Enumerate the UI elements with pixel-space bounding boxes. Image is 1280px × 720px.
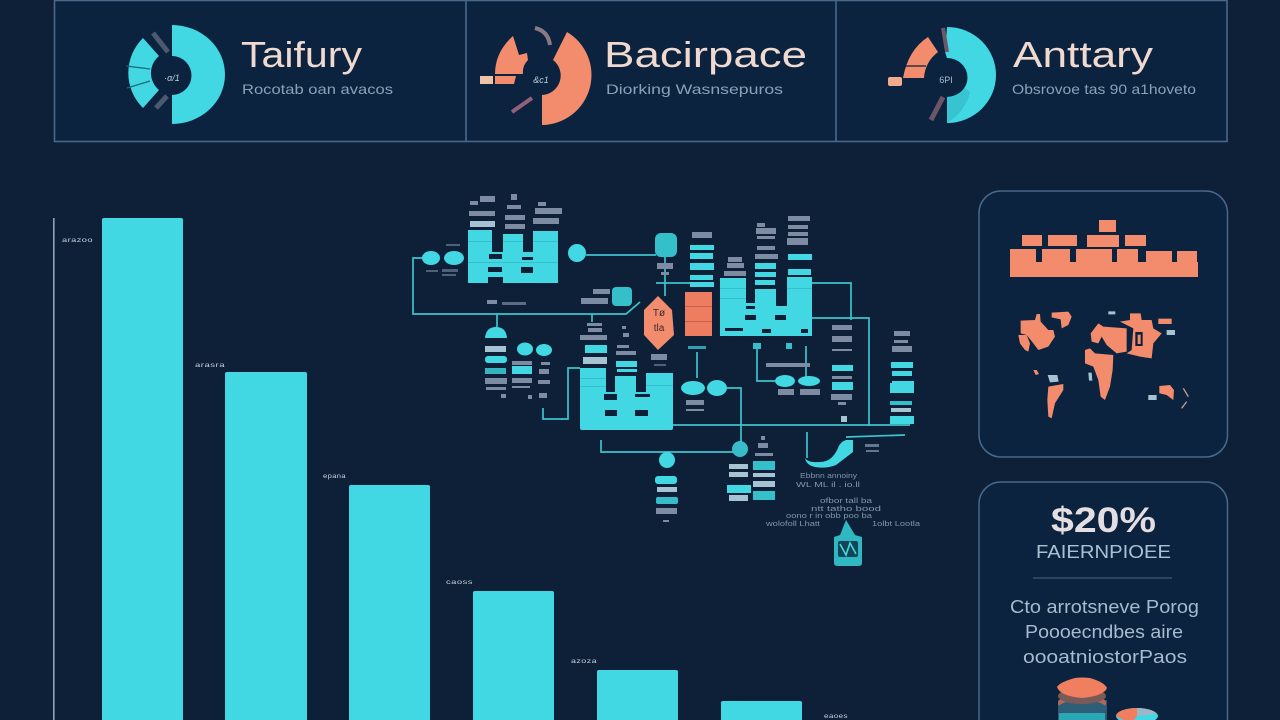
panel: brick chart and world map (979, 191, 1228, 457)
flow diagram (413, 194, 920, 566)
panel: statistic card (979, 482, 1228, 720)
column: dome stack (485, 327, 507, 398)
icon: cyan donut chart: ·α/1 (164, 73, 180, 83)
text: diagram small captions: ofbor tall ba (820, 498, 872, 505)
column: second stack (512, 342, 533, 399)
nodes: under orange rectangle (681, 346, 727, 411)
icon: orange hexagon: tla (654, 323, 665, 334)
bar 1 (62, 218, 183, 720)
icon: cyan donut chart (126, 25, 225, 124)
text: diagram small captions: Ebbnn annoiny (800, 473, 858, 480)
heading: Bacirpace: Bacirpace (604, 34, 807, 75)
stat label: FAIERNPIOEE (1036, 542, 1171, 562)
node: small labelled square (487, 287, 632, 306)
text: diagram small captions: WL ML il . io.ll (796, 482, 861, 489)
icon: orange hexagon: Tø (653, 308, 665, 319)
bar 5: azoza (571, 659, 598, 665)
column: stack at far centre right (831, 325, 853, 422)
icon: orange hexagon (644, 296, 674, 366)
text: Taifury caption: Rocotab oan avacos (242, 81, 393, 97)
text: diagram small captions: wolofoll Lhatt (765, 521, 820, 528)
cluster: lower centre blocks (580, 323, 673, 430)
text: description: Poooecndbes aire (1025, 622, 1183, 642)
text: diagram small captions: ntt tatho bood (811, 506, 881, 513)
nodes: left pair (422, 244, 464, 276)
bar chart (53, 218, 848, 720)
text: diagram small captions: 1olbt Lootla (872, 521, 920, 528)
chart: orange brick rows (1010, 220, 1198, 277)
icon: small pie (1116, 708, 1158, 720)
text: description: Cto arrotsneve Porog (1010, 597, 1199, 617)
cluster: upper right blocks (720, 216, 812, 336)
text: Anttary caption: Obsrovoe tas 90 a1hoveto (1012, 81, 1196, 97)
bar 1: arazoo (62, 238, 94, 244)
heading: Anttary: Anttary (1013, 34, 1153, 75)
bar 6 (721, 701, 848, 720)
bar 4 (446, 580, 554, 720)
cluster: upper left blocks (468, 194, 562, 283)
connector lines (413, 255, 910, 452)
bar 3 (323, 474, 430, 720)
text: description (1010, 597, 1199, 667)
column: far right stack (890, 331, 914, 424)
panel: top summary strip (54, 0, 1227, 142)
bar 6: eaoes (824, 714, 848, 720)
icon: cyan U-shaped pipe (805, 432, 879, 468)
text: Bacirpace caption: Diorking Wasnsepuros (606, 81, 783, 97)
column: stack with circle node (655, 452, 678, 522)
stat: $20%: $20% (1051, 501, 1156, 540)
text: diagram small captions (765, 473, 920, 528)
icon: mixed donut chart: 6PI (939, 75, 953, 85)
column: third stack (536, 344, 552, 398)
icon: orange donut chart (480, 28, 591, 125)
text: diagram small captions: oono r in obb poo ba (786, 513, 872, 520)
nodes: under upper right blocks (753, 343, 820, 395)
node: right of upper blocks (568, 244, 586, 262)
icon: orange donut chart: &c1 (533, 75, 549, 85)
icon: layered stack (1057, 678, 1107, 720)
bar 2: arasra (195, 363, 226, 369)
text: description: oooatniostorPaos (1023, 647, 1187, 667)
heading: Taifury: Taifury (241, 34, 362, 75)
icon: cyan bottle (834, 520, 862, 566)
node: top centre tile (655, 233, 677, 275)
bar 3: epana (323, 474, 346, 480)
map: world (1018, 311, 1188, 418)
bar 4: caoss (446, 580, 473, 586)
bar 2 (195, 363, 307, 720)
icon: mixed donut chart (888, 27, 996, 123)
block: orange rectangle with cyan stack (685, 232, 714, 336)
bar 5 (571, 659, 678, 720)
column: paired stacks (727, 436, 775, 501)
